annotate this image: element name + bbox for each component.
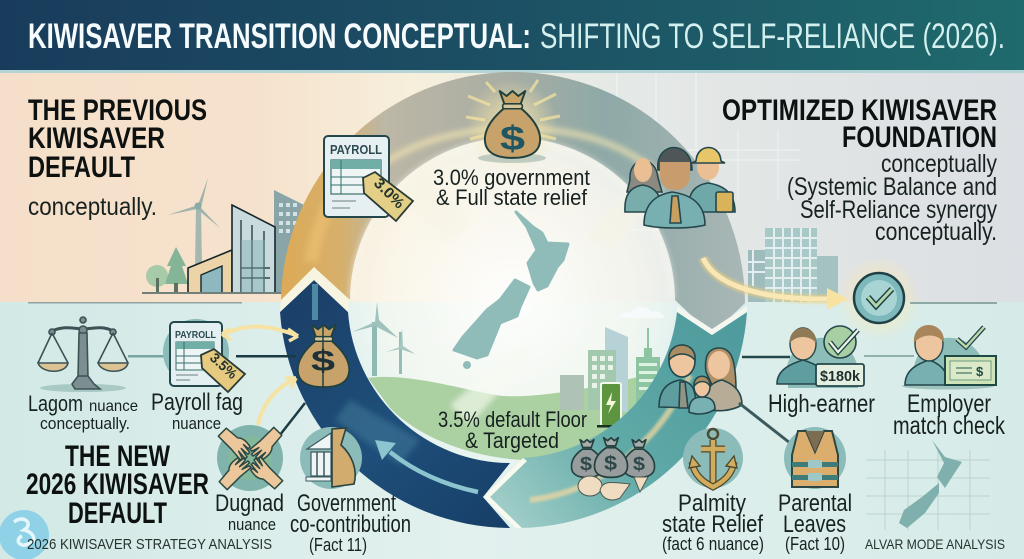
label: Government co-contribution: Government bbox=[297, 490, 396, 517]
icon: government bank and bag bbox=[300, 427, 362, 489]
icon: money bag with rays: $ bbox=[500, 120, 525, 158]
background: lower teal panel bbox=[0, 302, 1024, 559]
icon: employer match check: $ bbox=[976, 364, 984, 379]
label: 3.5% default floor: & Targeted bbox=[465, 428, 559, 453]
map: small New Zealand grid bbox=[866, 440, 990, 530]
label: Dugnad: Dugnad bbox=[215, 490, 284, 517]
icon: logo badge bbox=[0, 510, 49, 559]
heading: previous default bbox=[28, 94, 207, 221]
icon: grey money bags and broken shell: $ bbox=[633, 454, 645, 474]
heading: previous default: DEFAULT bbox=[28, 151, 135, 184]
heading: optimized foundation bbox=[722, 94, 997, 246]
label: Lagom nuance: conceptually. bbox=[40, 414, 130, 433]
label: Payroll fag bbox=[151, 389, 243, 433]
title: KIWISAVER TRANSITION CONCEPTUAL: bbox=[28, 17, 531, 56]
label: Parental Leaves bbox=[778, 490, 852, 554]
scene: previous default buildings and turbine bbox=[142, 178, 304, 294]
scene: cloud bbox=[618, 307, 664, 318]
title bbox=[28, 17, 1005, 56]
icon: grey money bags and broken shell: $ bbox=[580, 454, 592, 474]
icon: payroll 3.0%: 3.0% bbox=[370, 175, 408, 212]
header band bbox=[0, 0, 1024, 70]
icon: high-earner bbox=[777, 326, 864, 388]
icon: grey money bags and broken shell bbox=[571, 438, 655, 500]
gold arrows to money bag bbox=[222, 327, 298, 425]
label: Lagom nuance: nuance bbox=[89, 398, 138, 415]
label: Payroll fag: nuance bbox=[172, 414, 221, 433]
label: Government co-contribution: co-contribution bbox=[290, 511, 411, 538]
New Zealand map bbox=[454, 212, 568, 368]
icon: payroll 3.5%: PAYROLL bbox=[175, 329, 216, 341]
label: 3.0% government: & Full state relief bbox=[436, 185, 588, 210]
label: Payroll fag: Payroll fag bbox=[151, 389, 243, 416]
label: Palmity state relief: state Relief bbox=[662, 511, 763, 538]
heading: optimized foundation: conceptually bbox=[881, 150, 997, 178]
heading: previous default: conceptually. bbox=[28, 193, 157, 221]
label: Government co-contribution: (Fact 11) bbox=[309, 535, 367, 555]
footer: strategy analysis: 2026 KIWISAVER STRATEGY ANALYSIS bbox=[27, 536, 272, 553]
label: Employer match check bbox=[893, 390, 1005, 440]
arrow band: lower-left dark blue bbox=[280, 280, 510, 528]
heading: new 2026 default bbox=[26, 440, 209, 530]
icon: check badge bbox=[837, 256, 921, 340]
icon: workers group bbox=[625, 148, 735, 228]
heading: optimized foundation: conceptually. bbox=[875, 218, 997, 246]
icon: life vest bbox=[784, 427, 846, 489]
gold arrow to check badge bbox=[703, 258, 848, 310]
background: upper peach to grey panel bbox=[0, 70, 1024, 304]
label: Dugnad: nuance bbox=[228, 515, 276, 534]
scene: green hill and central turbines bbox=[352, 302, 672, 460]
icon: grey money bags and broken shell: $ bbox=[604, 453, 617, 475]
label: Government co-contribution bbox=[290, 490, 411, 555]
heading: new 2026 default: DEFAULT bbox=[68, 497, 167, 530]
label: High-earner: High-earner bbox=[768, 390, 875, 418]
label: Palmity state relief bbox=[662, 490, 764, 554]
icon: scales bbox=[38, 317, 128, 392]
label: Lagom nuance bbox=[28, 391, 138, 433]
label: Lagom nuance: Lagom bbox=[28, 391, 83, 416]
heading: previous default: KIWISAVER bbox=[28, 122, 165, 155]
icon: dugnad hands bbox=[216, 425, 285, 492]
icon: payroll 3.5% bbox=[163, 319, 245, 392]
icon: money bag on blue band bbox=[298, 325, 349, 389]
label: 3.5% default floor bbox=[438, 407, 587, 453]
label: Palmity state relief: (fact 6 nuance) bbox=[662, 534, 764, 554]
arrow band: upper gold to grey arc bbox=[281, 72, 745, 335]
icon: employer match check bbox=[902, 325, 996, 390]
icon: high-earner: $180k bbox=[820, 368, 861, 385]
inner glow of ring bbox=[327, 115, 697, 485]
heading: previous default: THE PREVIOUS bbox=[28, 94, 207, 127]
arrow band: lower-right teal bbox=[483, 312, 747, 528]
scene: right skyline bbox=[748, 228, 838, 302]
label: Palmity state relief: Palmity bbox=[678, 490, 746, 517]
label: Employer match check: Employer bbox=[907, 390, 991, 418]
label: Parental Leaves: Parental bbox=[778, 490, 852, 517]
arrow on blue band bbox=[375, 440, 478, 492]
label: Dugnad bbox=[215, 490, 284, 534]
heading: new 2026 default: 2026 KIWISAVER bbox=[26, 468, 209, 501]
label: 3.5% default floor: 3.5% default Floor bbox=[438, 407, 587, 432]
icon: family bbox=[659, 345, 742, 414]
icon: anchor bbox=[683, 428, 743, 488]
footer: Alvar mode analysis: ALVAR MODE ANALYSIS bbox=[865, 536, 1005, 552]
icon: payroll 3.0% bbox=[324, 136, 413, 221]
icon: money bag with rays bbox=[466, 79, 560, 171]
icon: payroll 3.0%: PAYROLL bbox=[330, 142, 382, 157]
icon: payroll 3.5%: 3.5% bbox=[207, 349, 241, 382]
label: Parental Leaves: (Fact 10) bbox=[785, 534, 845, 554]
heading: new 2026 default: THE NEW bbox=[65, 440, 171, 473]
icon: money bag on blue band: $ bbox=[311, 345, 335, 378]
label: 3.0% government: 3.0% government bbox=[433, 165, 590, 190]
label: 3.0% government bbox=[433, 165, 590, 210]
label: Parental Leaves: Leaves bbox=[783, 511, 846, 538]
scene: green city and charger bbox=[560, 327, 660, 428]
